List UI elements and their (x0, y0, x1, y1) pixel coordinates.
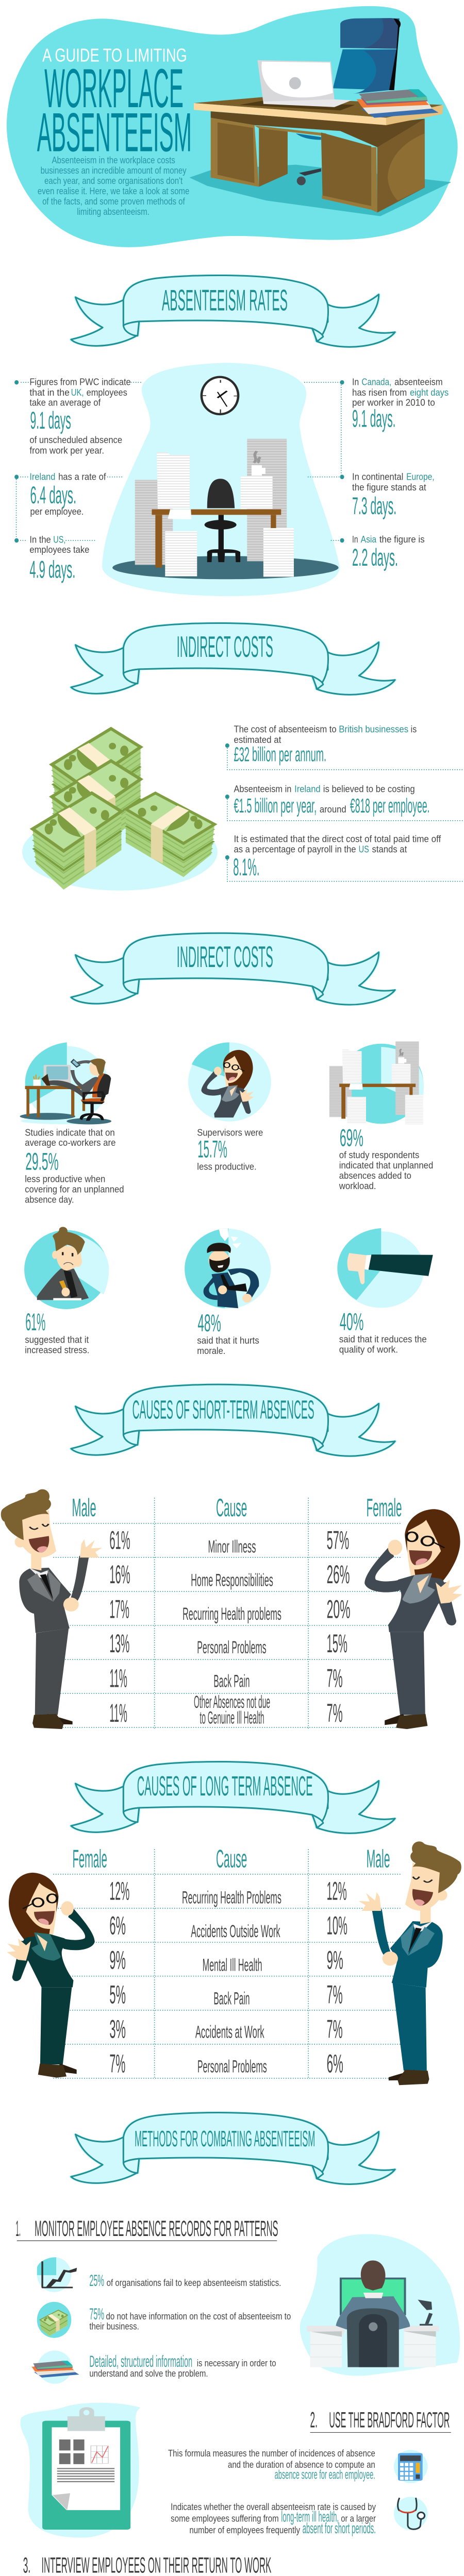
stat: 40%: quality of work. (339, 1345, 398, 1355)
table header (73, 1844, 390, 1873)
icon: books (31, 2350, 79, 2384)
panel: causes of long term absence: 9% (327, 1946, 343, 1975)
stat: 48%: morale. (197, 1346, 225, 1357)
point: 25%: 25% (89, 2271, 104, 2290)
stat: 69%: 69% (340, 1124, 363, 1151)
illustration: clipboard (21, 2403, 141, 2537)
panel: causes of short-term absences: 20% (327, 1595, 351, 1624)
stat: Canada: Canada, (361, 377, 391, 387)
table header: Cause (216, 1844, 247, 1873)
heading (15, 2217, 278, 2241)
panel: causes of short-term absences: 7% (327, 1664, 343, 1692)
point: structured information: Detailed, structured information (89, 2352, 192, 2370)
cost: Britain: estimated at (234, 735, 281, 745)
panel: causes of long term absence (7, 1761, 461, 2085)
point: 75%: 75% (89, 2304, 104, 2323)
stat: UK: 9.1 days (30, 407, 71, 434)
cost: Britain: The cost of absenteeism to (234, 724, 337, 735)
cost: Ireland: Absenteeism in (234, 784, 291, 794)
panel: causes of long term absence: 7% (327, 2015, 343, 2044)
panel: absenteeism rates (14, 275, 449, 596)
panel: causes of short-term absences: 57% (327, 1526, 349, 1555)
row: back pain: 11% (109, 1664, 127, 1692)
intro text: each year, and some organisations don't (44, 176, 183, 186)
table header: Male (72, 1493, 96, 1521)
illustration: stacks of money (22, 728, 218, 891)
panel: causes of short-term absences (1, 1384, 462, 1729)
stat: 29.5%: 29.5% (25, 1148, 59, 1175)
illustration: man on phone at desk (20, 1042, 111, 1125)
stat: 48%: 48% (197, 1309, 221, 1336)
stat: 29.5%: less productive when (25, 1174, 105, 1184)
stat: 29.5%: average co-workers are (25, 1138, 115, 1148)
title (37, 45, 192, 163)
stat: Asia: In (352, 534, 358, 545)
point: indicates: or a larger (341, 2514, 376, 2524)
banner: long term absence (71, 1761, 395, 1833)
stat: UK: that in the (29, 387, 70, 398)
stat: 40% (339, 1308, 427, 1355)
stat: 48%: said that it hurts (197, 1336, 259, 1346)
heading: 2. (310, 2408, 318, 2432)
panel: absenteeism rates: 6.4 days. (30, 481, 76, 509)
stat: Asia: Asia (361, 534, 376, 545)
row: personal problems: 7% (109, 2049, 125, 2078)
row: recurring health problems: 17% (109, 1595, 129, 1624)
icon: chart (37, 2257, 77, 2292)
banner: indirect costs (71, 623, 395, 694)
figure: man (1, 1489, 102, 1729)
row: personal problems: 13% (109, 1629, 129, 1658)
stat: US: US, (53, 535, 65, 545)
stat: 15.7% (197, 1128, 263, 1172)
cost: Britain: is (411, 724, 417, 735)
panel: causes of long term absence: 7% (327, 1980, 343, 2009)
panel: causes of short-term absences: 15% (327, 1629, 347, 1658)
intro text: of the facts, and some proven methods of (42, 196, 185, 207)
stat: 15.7%: Supervisors were (197, 1128, 263, 1138)
illustration: empty desk with paper stacks (112, 439, 339, 579)
point: 75% (89, 2304, 291, 2332)
stat: Europe: In continental (352, 472, 403, 482)
banner: short-term absences (71, 1384, 395, 1456)
icon: wall clock (201, 376, 239, 415)
row: home responsibilities: Home Responsibilities (191, 1570, 273, 1590)
stat: US: In the (29, 535, 51, 545)
stat: US: employees take (29, 545, 89, 555)
table header (72, 1493, 402, 1521)
figure: woman (7, 1873, 95, 2078)
row: mental ill health (109, 1946, 343, 1975)
row: minor illness: 61% (109, 1526, 130, 1555)
stat: Canada: In (352, 377, 359, 387)
point: indicates: some employees suffering from (171, 2514, 279, 2524)
heading: 1. (15, 2217, 21, 2241)
row: back pain (109, 1664, 343, 1692)
stat: UK: from work per year. (29, 446, 104, 456)
stat: 61%: suggested that it (25, 1335, 89, 1345)
stat: UK: UK, (71, 387, 84, 398)
stat: 40%: 40% (340, 1308, 363, 1335)
heading (23, 2553, 271, 2576)
panel: causes of short-term absences: 7% (327, 1699, 343, 1727)
stat: Ireland (29, 472, 106, 517)
cost: US: as a percentage of payroll in the (234, 844, 356, 855)
row: personal problems (109, 2049, 343, 2078)
table header: Female (73, 1844, 107, 1873)
stat: Ireland: Ireland (29, 472, 55, 482)
cost: Britain (225, 724, 464, 770)
point: structured information: understand and solve the problem. (89, 2369, 208, 2379)
stat: 29.5%: Studies indicate that on (25, 1128, 115, 1138)
illustration: supervisor on the phone (188, 1042, 271, 1122)
stat: 61%: increased stress. (25, 1345, 89, 1355)
intro text: businesses an incredible amount of money (41, 165, 187, 176)
row: personal problems: Personal Problems (197, 1637, 267, 1657)
illustration: person at computer (300, 2234, 460, 2376)
stat: UK: Figures from PWC indicate (29, 377, 131, 387)
background blob (102, 363, 340, 596)
banner: indirect costs (71, 933, 395, 1005)
point: 25% (89, 2271, 281, 2290)
intro text: limiting absenteeism. (77, 207, 150, 217)
icon: stethoscope (394, 2497, 427, 2530)
row: back pain: Back Pain (213, 1671, 250, 1691)
illustration: thumbs down (337, 1228, 433, 1308)
point: 75%: their business. (89, 2321, 139, 2332)
panel: absenteeism rates: 4.9 days. (29, 556, 75, 583)
stat: UK: take an average of (29, 398, 101, 408)
panel: causes of long term absence: 12% (327, 1877, 347, 1906)
stat: Europe: Europe, (406, 472, 435, 482)
panel: hero header: A GUIDE TO LIMITING (42, 45, 187, 66)
panel: causes of long term absence: Male (367, 1844, 390, 1873)
stat: UK (29, 377, 131, 456)
stat: Ireland: has a rate of (58, 472, 106, 482)
stat: 29.5% (25, 1128, 124, 1205)
row: accidents at work: 3% (109, 2015, 126, 2044)
point: indicates (171, 2502, 376, 2537)
row: mental ill health: 9% (109, 1946, 126, 1975)
panel: causes of long term absence: 10% (327, 1911, 347, 1940)
row: mental ill health: Mental Ill Health (203, 1955, 262, 1975)
illustration: paper stacks on desk (329, 1041, 424, 1124)
row: other absences: to Genuine Ill Health (200, 1707, 264, 1727)
method 2: Bradford factor (21, 2403, 451, 2537)
hero background blob (7, 6, 458, 247)
panel: causes of short-term absences: 26% (327, 1560, 350, 1589)
row: back pain (109, 1980, 343, 2009)
table header: Cause (216, 1493, 247, 1521)
stat: Canada: has risen from (352, 387, 407, 398)
point: 75%: do not have information on the cost of absenteeism to (106, 2311, 291, 2321)
icon: calculator (394, 2450, 427, 2483)
row: other absences (109, 1692, 343, 1727)
figure: man (359, 1841, 461, 2085)
stat: 29.5%: covering for an unplanned (25, 1184, 124, 1195)
row: recurring health problems: 12% (109, 1877, 129, 1906)
point: indicates: number of employees frequently (189, 2525, 300, 2535)
row: back pain: Back Pain (213, 1988, 250, 2008)
row: personal problems (109, 1629, 347, 1658)
stat: Ireland: per employee. (30, 506, 84, 517)
panel: methods for combating absenteeism (5, 2113, 460, 2576)
cost: Ireland: around (320, 804, 346, 815)
stat: US (29, 535, 89, 583)
row: home responsibilities (109, 1560, 350, 1590)
stat: Asia: the figure is (379, 534, 425, 545)
illustration: stressed man (24, 1227, 109, 1309)
method 1: monitor records (15, 2126, 460, 2384)
stat: 61% (25, 1309, 89, 1355)
illustration: desk with laptop, chair and books (189, 18, 451, 216)
cost: Ireland (225, 784, 464, 821)
cost: Britain: British businesses (339, 724, 408, 735)
point: 25%: of organisations fail to keep absenteeism statistics. (107, 2278, 281, 2288)
cost: US: stands at (372, 844, 407, 855)
method 3: interview employees (23, 2553, 459, 2576)
table grid (53, 1498, 401, 1728)
panel: hero header (7, 6, 458, 247)
row: recurring health problems (109, 1595, 351, 1624)
cost: US: 8.1%. (233, 853, 259, 880)
row: recurring health problems (109, 1877, 347, 1907)
method 1: monitor records: is necessary in order to (197, 2359, 276, 2369)
banner: methods (71, 2113, 395, 2184)
row: home responsibilities: 16% (109, 1560, 130, 1589)
row: personal problems: Personal Problems (197, 2056, 267, 2076)
stat: 29.5%: absence day. (25, 1195, 74, 1205)
stat: 69% (339, 1124, 433, 1192)
point: formula (168, 2448, 375, 2482)
stat: 15.7%: 15.7% (197, 1136, 227, 1163)
row: other absences: 11% (109, 1699, 127, 1727)
point: structured information (89, 2352, 276, 2379)
intro text (38, 155, 189, 217)
row: minor illness (109, 1526, 349, 1556)
banner: absenteeism rates (71, 275, 395, 347)
stat: UK: of unscheduled absence (29, 435, 122, 445)
stat: Europe (352, 472, 435, 520)
panel: indirect costs, money (22, 623, 464, 891)
row: accidents outside work: 6% (109, 1911, 126, 1940)
stat: Canada (352, 377, 449, 432)
row: back pain: 5% (109, 1980, 126, 2009)
row: minor illness: Minor Illness (208, 1536, 256, 1556)
stat: 15.7%: less productive. (197, 1162, 257, 1172)
row: accidents at work (109, 2015, 343, 2044)
stat: 61%: 61% (25, 1309, 45, 1336)
dotted connectors (14, 380, 344, 543)
table grid (53, 1849, 401, 2079)
cost: US: US (359, 844, 369, 855)
panel: causes of long term absence: 6% (327, 2049, 343, 2078)
intro text: Absenteeism in the workplace costs (52, 155, 175, 165)
cost: Ireland: Ireland (294, 784, 321, 794)
intro text: even realise it. Here, we take a look at some (38, 186, 189, 196)
stat: Asia (352, 534, 425, 571)
icon: money (37, 2302, 71, 2338)
row: accidents at work: Accidents at Work (195, 2022, 264, 2042)
stat: UK: employees (87, 387, 127, 398)
stat: 48% (197, 1309, 259, 1357)
row: accidents outside work (109, 1911, 347, 1941)
cost: US (225, 834, 464, 882)
figure: woman (364, 1509, 462, 1729)
stat: 69%: workload. (339, 1181, 376, 1192)
illustration: angry man (185, 1228, 271, 1309)
panel: indirect costs, productivity (20, 933, 433, 1357)
